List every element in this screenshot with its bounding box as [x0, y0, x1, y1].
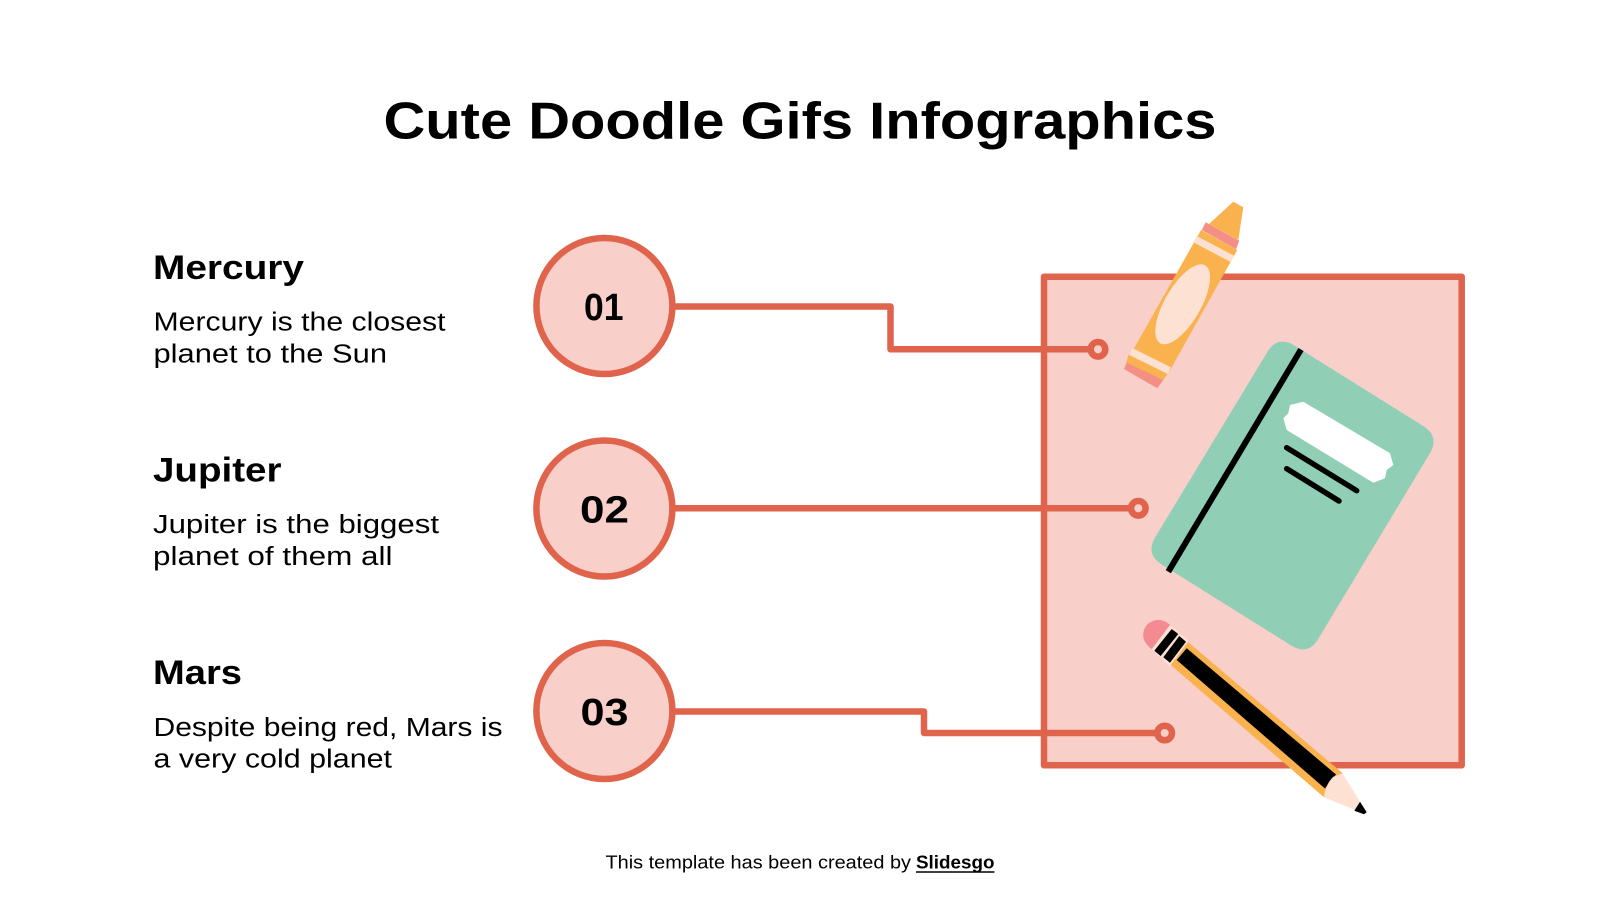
connector 01	[672, 306, 1105, 357]
item 01: Mercury text	[153, 249, 446, 368]
panel: desk background	[1044, 277, 1462, 765]
description line 1: Mercury is the closest	[154, 309, 446, 337]
icon: notebook	[1151, 342, 1434, 649]
connector 02	[672, 501, 1146, 516]
number badge 03: 03	[580, 692, 628, 734]
number badge 01	[536, 238, 672, 374]
item 02: Jupiter text	[153, 452, 439, 571]
description line 1: Despite being red, Mars is	[154, 714, 502, 742]
number badge 02	[536, 440, 672, 576]
footer credit	[606, 851, 994, 872]
lead tip	[1354, 802, 1367, 814]
number badge 02: 02	[580, 490, 629, 532]
sharpened wood	[1324, 773, 1360, 810]
item 03: Mars text	[153, 654, 502, 774]
heading: Jupiter: Jupiter	[153, 452, 282, 490]
description line 2: planet to the Sun	[154, 340, 387, 368]
number badge 01: 01	[584, 287, 624, 329]
credit link: Slidesgo	[916, 851, 994, 872]
icon: pencil	[1143, 620, 1367, 814]
number badge 03	[536, 643, 672, 779]
icon: crayon	[1124, 202, 1243, 388]
description line 2: a very cold planet	[154, 746, 392, 774]
eraser	[1143, 620, 1170, 649]
connector 03	[672, 712, 1172, 740]
description line 2: planet of them all	[153, 543, 392, 571]
writing lines	[1287, 448, 1357, 501]
ferrule	[1152, 625, 1188, 667]
heading: Mars: Mars	[153, 654, 242, 692]
white label	[1283, 402, 1393, 483]
elastic band	[1168, 350, 1301, 572]
description line 1: Jupiter is the biggest	[153, 511, 439, 539]
pencil body	[1171, 642, 1343, 797]
title: Cute Doodle Gifs Infographics	[384, 92, 1216, 150]
credit text: This template has been created by	[606, 851, 912, 872]
notebook cover	[1151, 342, 1434, 649]
heading: Mercury: Mercury	[153, 249, 304, 287]
